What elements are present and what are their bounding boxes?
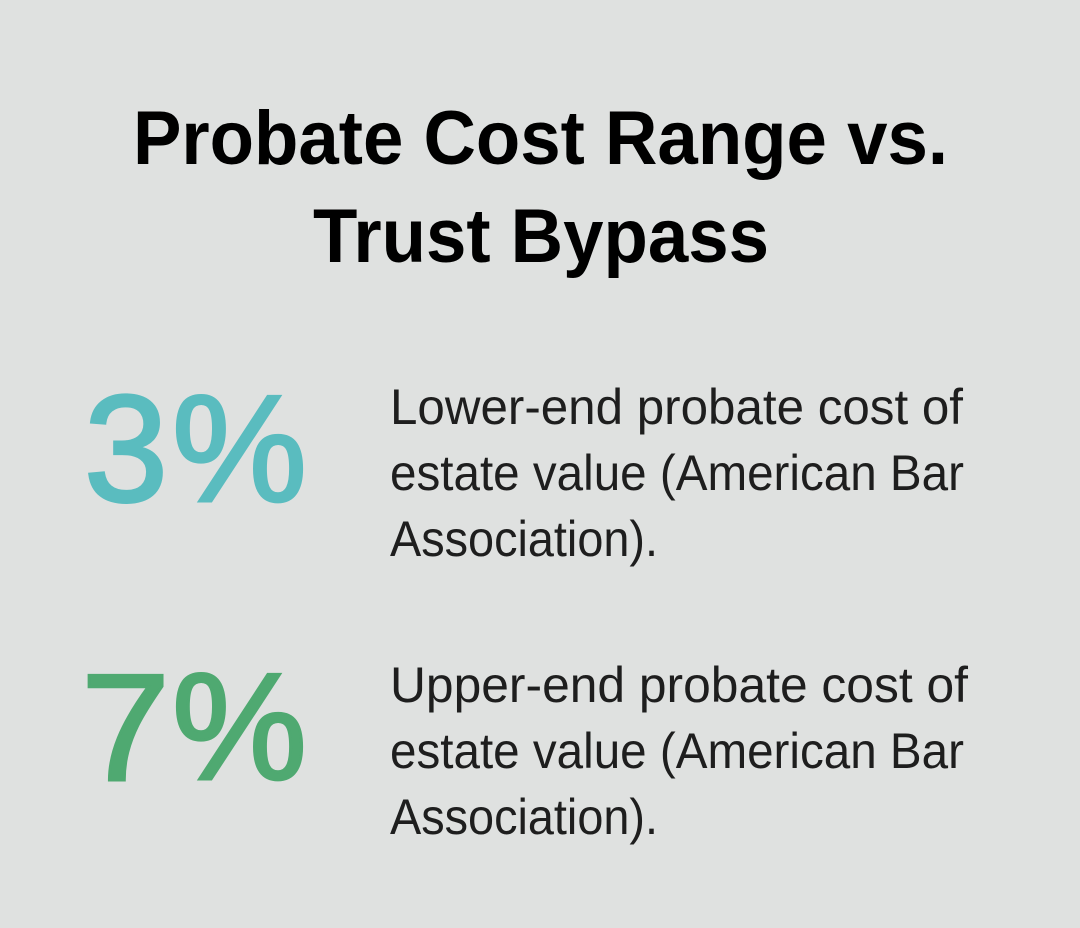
- stat value: 3%: [84, 364, 307, 534]
- stat row: 3%: [84, 364, 964, 567]
- description: upper-end cost: estate value (American Bar: [390, 723, 964, 779]
- description: upper-end cost: Upper-end probate cost of: [390, 657, 968, 713]
- title: Probate Cost Range vs.: [133, 96, 948, 181]
- description: lower-end cost: [390, 379, 964, 567]
- description: upper-end cost: [390, 657, 968, 845]
- description: upper-end cost: Association).: [390, 789, 658, 845]
- stat value: 3%: %: [172, 364, 307, 534]
- title: Trust Bypass: [313, 194, 769, 279]
- title: [133, 96, 948, 279]
- description: lower-end cost: Association).: [390, 511, 658, 567]
- description: lower-end cost: Lower-end probate cost of: [390, 379, 963, 435]
- stat value: 7%: [81, 642, 307, 813]
- stat value: 7%: %: [172, 642, 307, 812]
- stat value: 7%: 7: [81, 643, 170, 813]
- stat row: 7%: [81, 642, 968, 845]
- stat value: 3%: 3: [84, 364, 168, 534]
- description: lower-end cost: estate value (American Bar: [390, 445, 964, 501]
